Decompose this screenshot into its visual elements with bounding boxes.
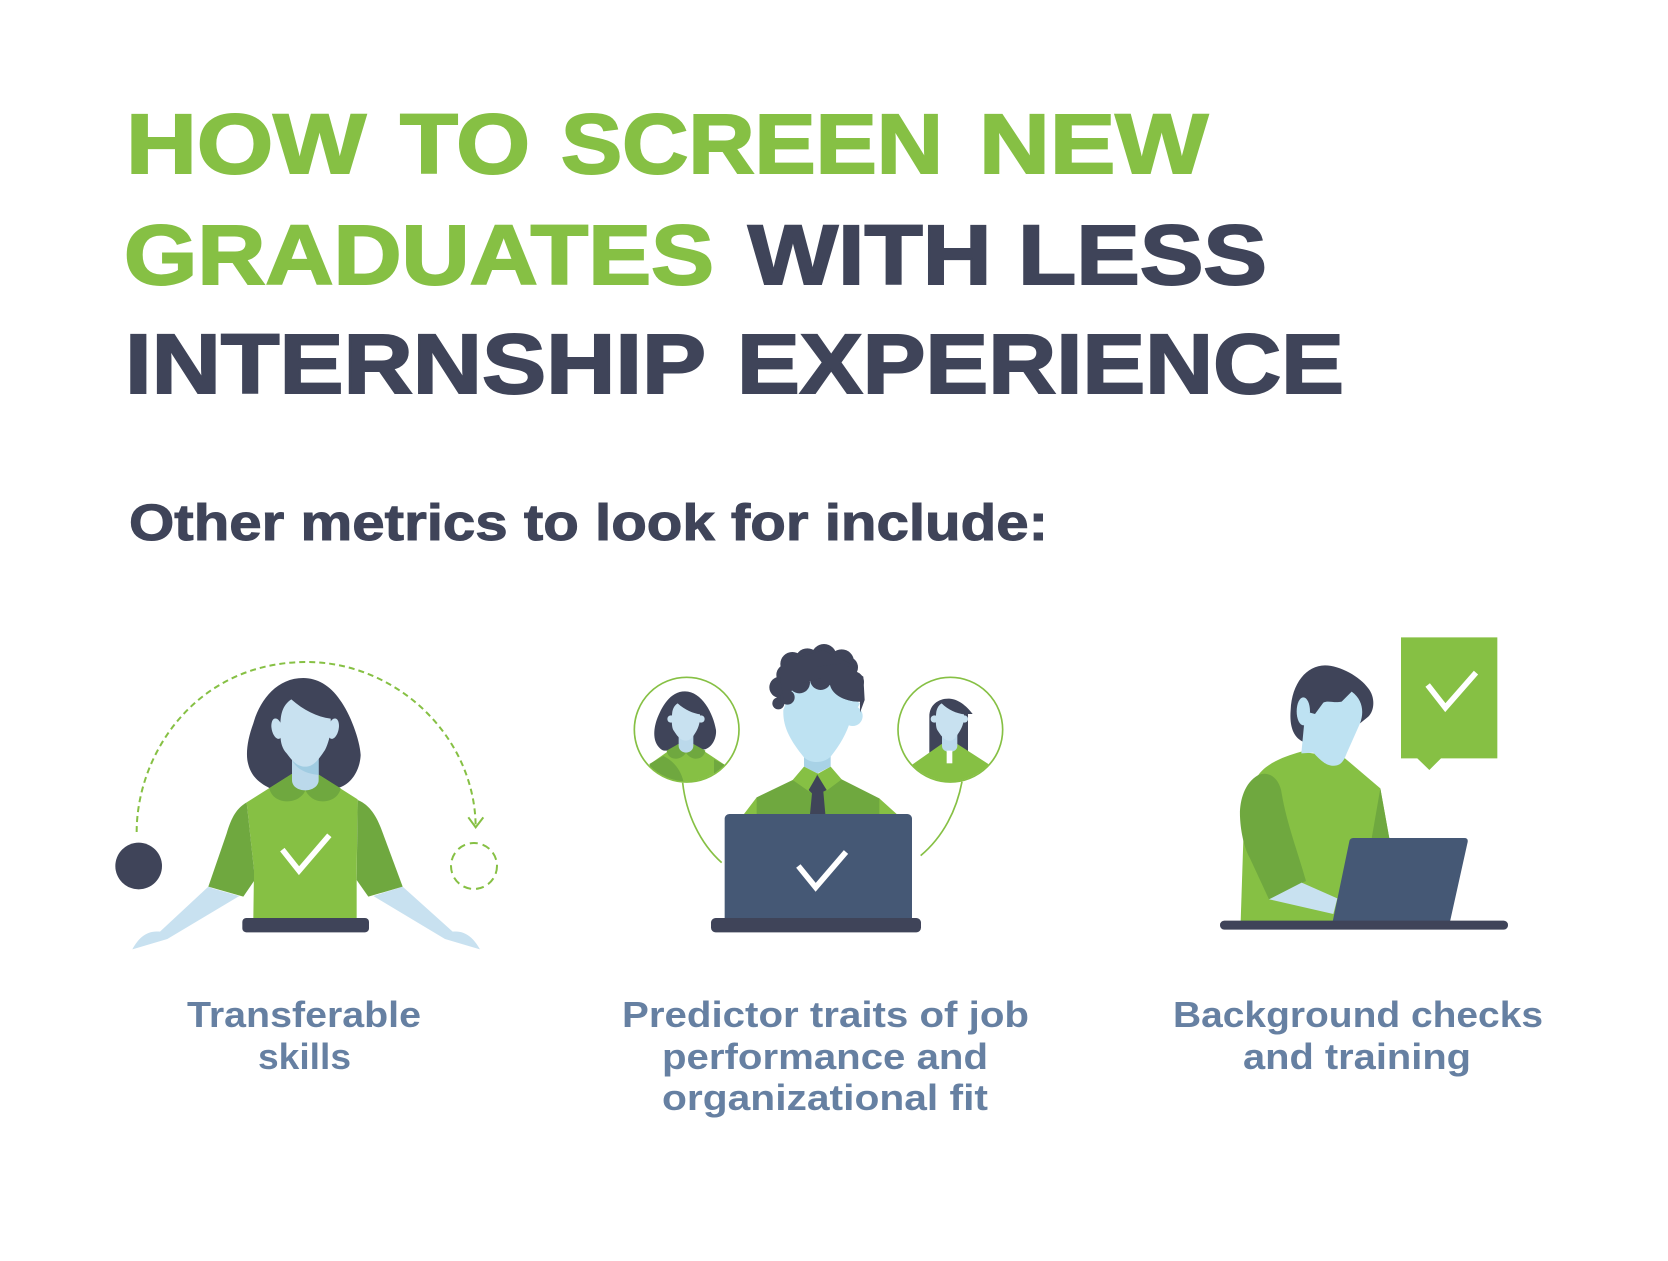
- curly hair: [769, 644, 865, 713]
- title: GRADUATES: [124, 208, 714, 302]
- illustration: predictor traits: [634, 644, 1003, 932]
- illustration: transferable skills: [115, 662, 497, 949]
- man figure: [744, 644, 897, 814]
- label: background checks: [1173, 994, 1543, 1077]
- check mark: [282, 835, 329, 871]
- label: predictor traits: organizational fit: [662, 1077, 988, 1118]
- label: predictor traits: performance and: [662, 1036, 988, 1077]
- title: HOW: [126, 97, 367, 191]
- dashed circle: [451, 843, 497, 889]
- label: background checks: and training: [1243, 1036, 1471, 1077]
- title: NEW: [979, 97, 1209, 191]
- subheading: Other metrics to look for include:: [129, 494, 1048, 551]
- person figure: [1240, 665, 1389, 922]
- solid dot: [115, 843, 162, 889]
- left candidate avatar: [634, 677, 739, 785]
- laptop base: [711, 918, 921, 932]
- label: predictor traits: [622, 994, 1029, 1118]
- desk bar: [242, 918, 369, 932]
- label: predictor traits: Predictor traits of job: [622, 994, 1029, 1035]
- right candidate avatar: [898, 677, 1003, 785]
- connector lines: [683, 782, 962, 863]
- bubble check mark: [1428, 673, 1476, 708]
- title: TO: [400, 97, 530, 191]
- label: background checks: Background checks: [1173, 994, 1543, 1035]
- dashed arc arrow: [137, 662, 483, 832]
- check mark: [798, 852, 846, 887]
- desk bar: [1220, 921, 1508, 930]
- laptop: [1333, 838, 1468, 922]
- label: transferable skills: skills: [258, 1036, 351, 1077]
- title: INTERNSHIP: [125, 317, 706, 411]
- woman figure: [132, 678, 480, 949]
- speech bubble: [1401, 637, 1497, 770]
- title: EXPERIENCE: [737, 317, 1344, 411]
- title: [124, 97, 1344, 411]
- label: transferable skills: Transferable: [187, 994, 421, 1035]
- title: WITH LESS: [748, 208, 1267, 302]
- title: SCREEN: [561, 97, 943, 191]
- laptop: [725, 814, 912, 922]
- label: transferable skills: [187, 994, 421, 1077]
- illustration: background checks: [1220, 637, 1508, 930]
